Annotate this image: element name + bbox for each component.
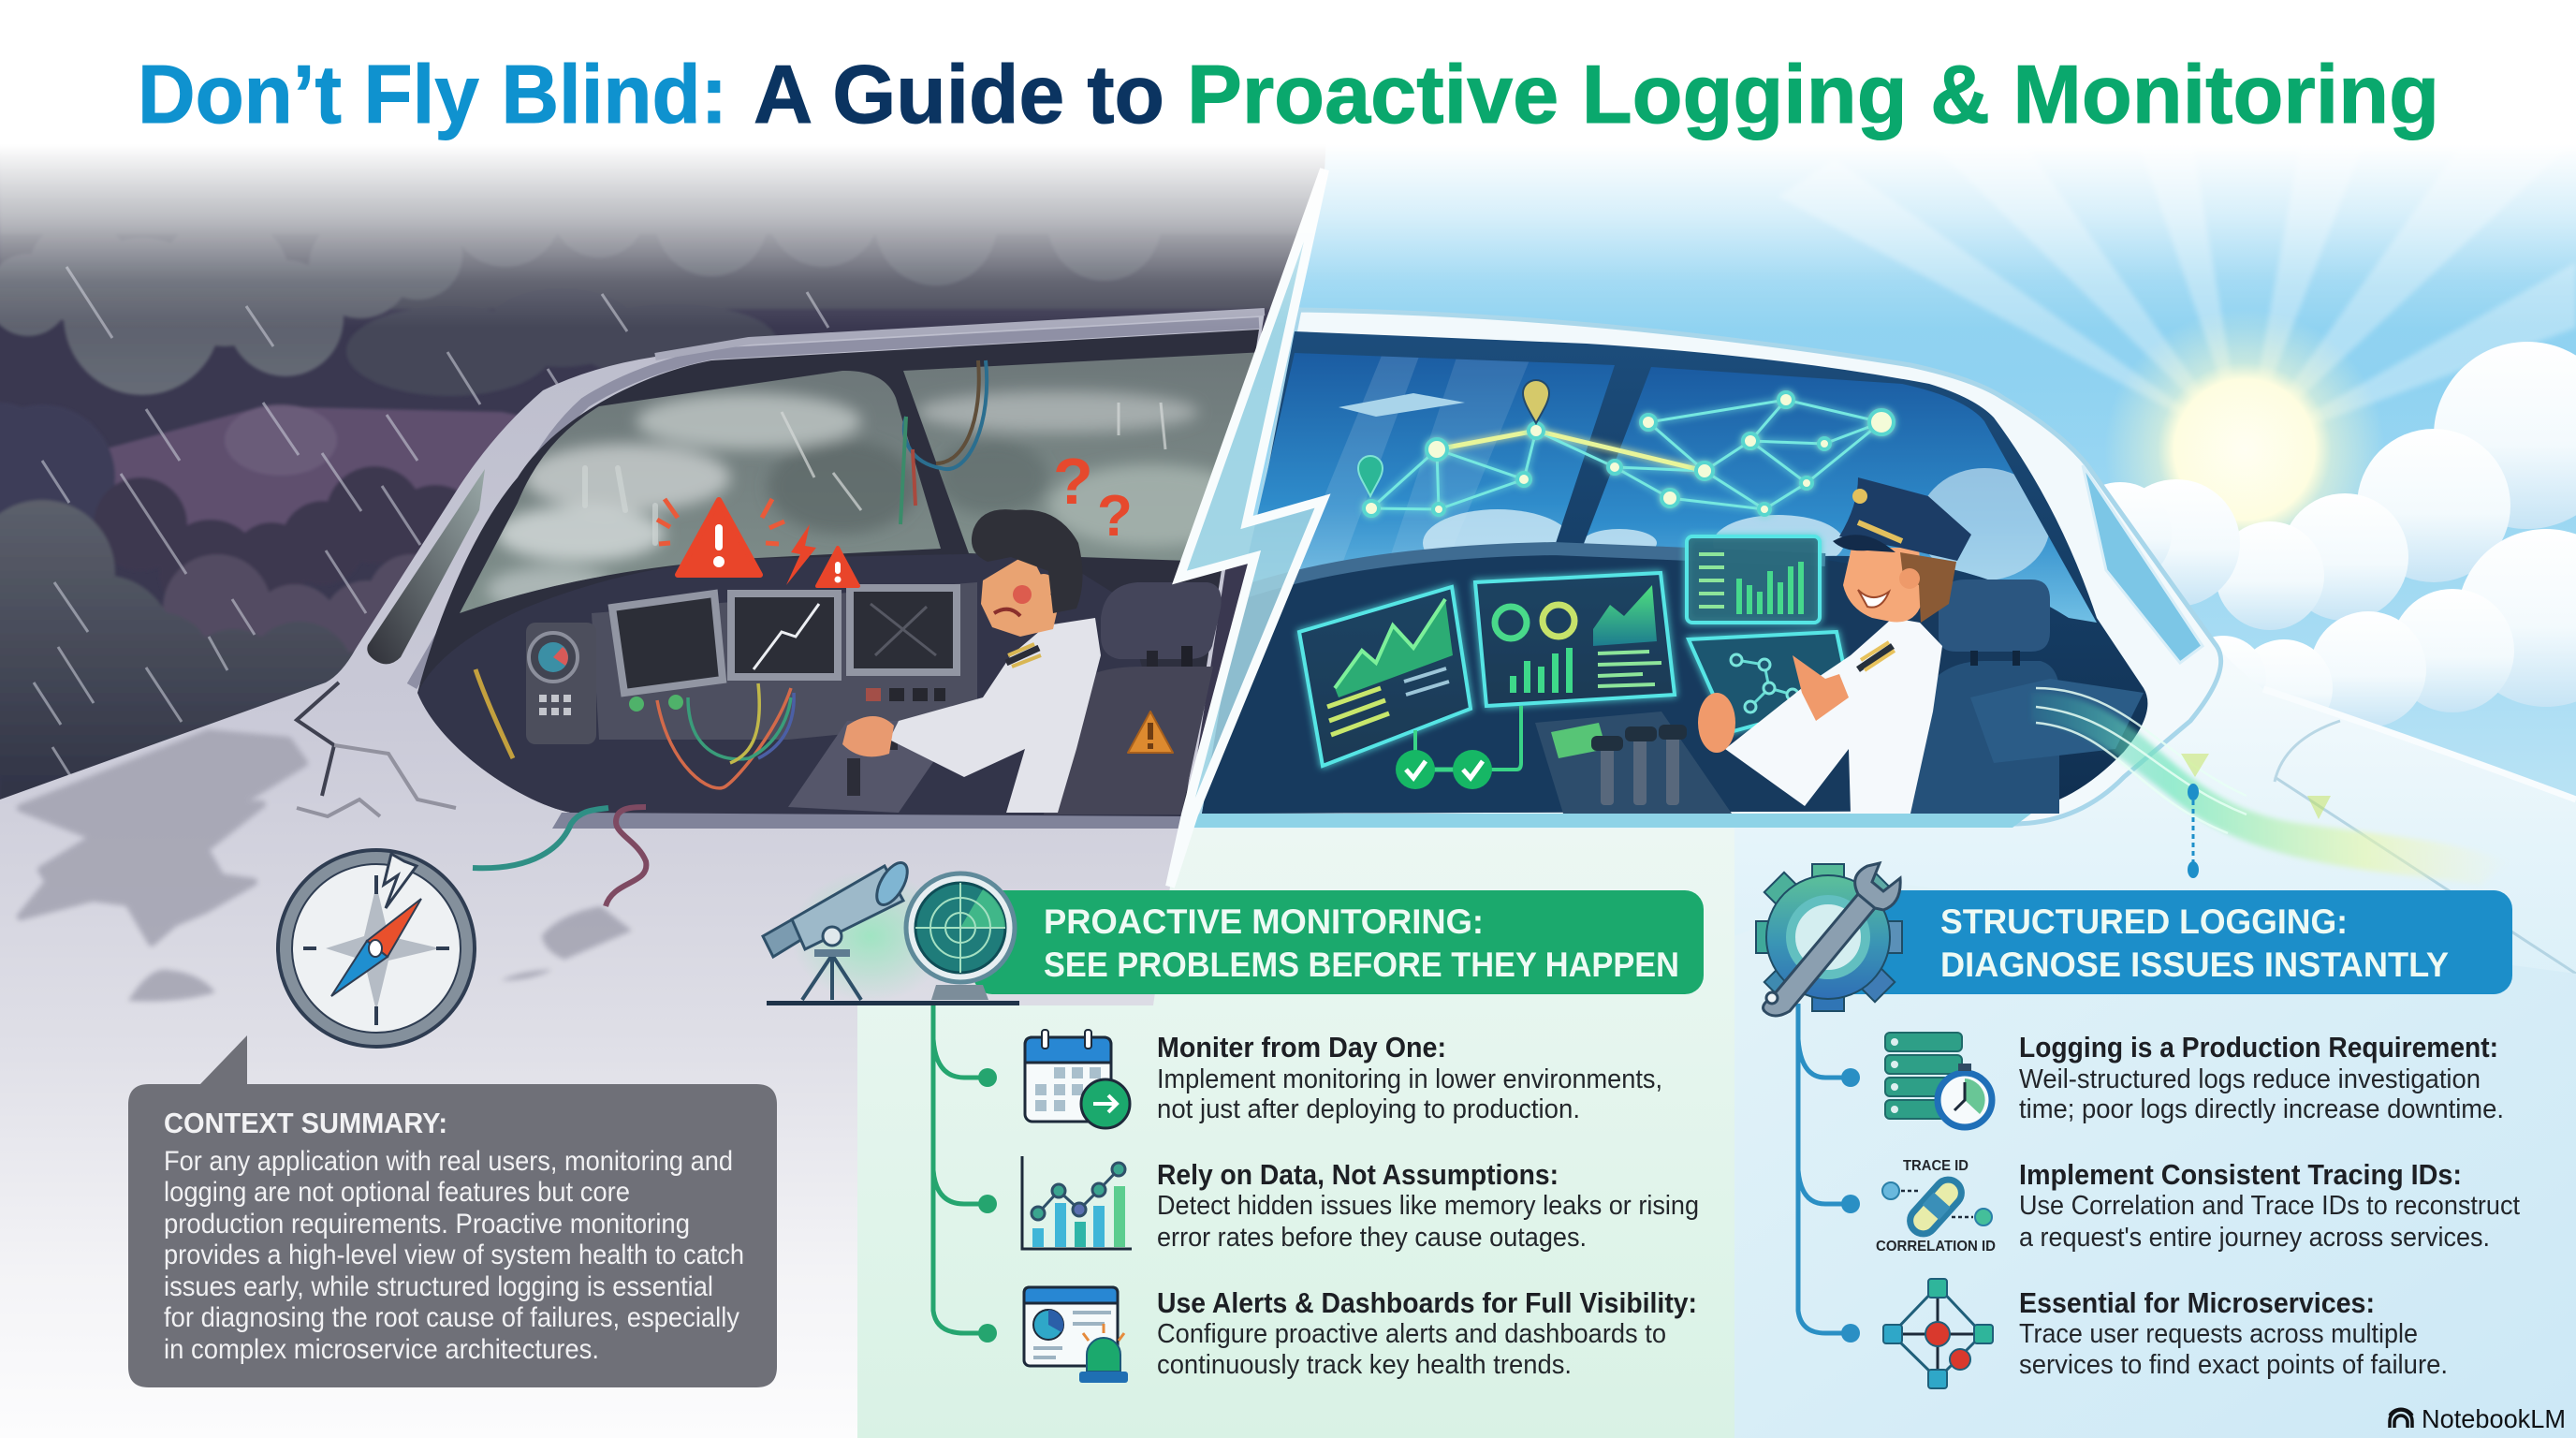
cockpit interior [417, 330, 1259, 816]
callout: context summary: for diagnosing the root cause of failures, especially [164, 1302, 739, 1333]
dashboard [417, 552, 1183, 816]
title: A Guide to [754, 48, 1164, 140]
item: monitor from day one: not just after deploying to production. [1157, 1094, 1580, 1124]
icon: dashboard with alarm [1024, 1287, 1128, 1383]
item: rely on data: Rely on Data, Not Assumptions: [1157, 1158, 1559, 1191]
header pill: STRUCTURED LOGGING: [1940, 902, 2348, 941]
sun rays [1778, 131, 2576, 450]
item: logging is a production requirement: Logging is a Production Requirement: [2019, 1031, 2498, 1064]
confused question marks: ? [1097, 484, 1133, 549]
cables off the fuselage [473, 807, 646, 906]
status checks [1396, 706, 1521, 789]
item: rely on data: Detect hidden issues like memory leaks or rising [1157, 1191, 1699, 1221]
side console with data stream source [1970, 679, 2144, 763]
title: Don’t Fly Blind: [138, 48, 727, 140]
lightning divider [1170, 169, 1325, 887]
icon: log servers with stopwatch [1885, 1033, 1992, 1127]
icon: trace link: CORRELATION ID [1876, 1239, 1996, 1255]
fogged windshields [460, 352, 1265, 613]
route network [1371, 400, 1881, 509]
item: monitor from day one: Implement monitoring in lower environments, [1157, 1064, 1662, 1094]
panel: storm side [0, 153, 1325, 1344]
seat [1044, 582, 1222, 814]
item: essential for microservices: Essential for Microservices: [2019, 1286, 2375, 1319]
item: logging is a production requirement: time; poor logs directly increase downtime. [2019, 1094, 2504, 1124]
throttle console [788, 721, 933, 813]
item: rely on data [1022, 1156, 1699, 1253]
item: alerts and dashboards [1024, 1286, 1697, 1383]
item: implement consistent tracing ids: Use Correlation and Trace IDs to reconstruct [2019, 1191, 2520, 1221]
icon: trace link [1876, 1158, 1996, 1255]
header pill [1825, 890, 2512, 994]
panel: right dashboard [1202, 536, 2041, 814]
panel: right canopy frame [1198, 310, 2221, 824]
map pins [1523, 380, 1549, 423]
side window slit [2083, 465, 2203, 663]
cracks [297, 682, 456, 816]
blue connector tree [1798, 1004, 1860, 1343]
instrument panel with gauge [476, 623, 596, 758]
callout: context summary: logging are not optional features but core [164, 1177, 630, 1208]
left pilot [842, 509, 1101, 813]
title: Proactive Logging & Monitoring [1187, 48, 2439, 140]
icon: service mesh [1883, 1279, 1993, 1388]
header pill: DIAGNOSE ISSUES INSTANTLY [1940, 946, 2449, 984]
item: alerts and dashboards: continuously track key health trends. [1157, 1350, 1572, 1380]
item: implement consistent tracing ids: Implement Consistent Tracing IDs: [2019, 1158, 2462, 1191]
title [138, 48, 2439, 140]
callout: context summary: issues early, while structured logging is essential [164, 1271, 713, 1302]
panel: blue background [1734, 880, 2576, 1438]
pilot cap [1839, 477, 1971, 561]
item: rely on data: error rates before they cause outages. [1157, 1223, 1587, 1253]
header pill [973, 890, 1704, 994]
item: implement consistent tracing ids: a request's entire journey across services. [2019, 1223, 2490, 1253]
panel: right fuselage [1161, 646, 2576, 1030]
hands [1698, 693, 1735, 753]
item: logging is a production requirement: Weil-structured logs reduce investigation [2019, 1064, 2481, 1094]
callout: context summary [128, 1035, 777, 1387]
panel: structured logging [1756, 863, 2520, 1388]
panel: right windshield with route network [1236, 346, 2106, 627]
data stream [2031, 688, 2509, 885]
item: monitor from day one [1025, 1030, 1662, 1128]
panel: clear sky with sun and clouds [1161, 0, 2576, 936]
callout: context summary: provides a high-level view of system health to catch [164, 1240, 744, 1270]
confused question marks [1056, 458, 1129, 536]
item: essential for microservices: Trace user requests across multiple [2019, 1319, 2418, 1349]
item: monitor from day one: Moniter from Day One: [1157, 1031, 1446, 1064]
icon: trace link: TRACE ID [1903, 1158, 1969, 1174]
confused question marks: ? [1053, 445, 1093, 518]
icon: telescope and radar [763, 858, 1019, 1005]
icon: trend chart [1022, 1156, 1132, 1249]
item: essential for microservices: services to find exact points of failure. [2019, 1350, 2448, 1380]
top fade [0, 0, 2576, 328]
canopy frame stripe [412, 323, 1259, 686]
callout: context summary: production requirements. Proactive monitoring [164, 1209, 690, 1240]
screen: dashboard gauges [1475, 573, 1675, 706]
oil puddles [21, 733, 632, 1002]
panel: right pilot [1698, 477, 2144, 814]
item: implement consistent tracing ids [1876, 1158, 2520, 1255]
clouds [2069, 342, 2576, 737]
header pill: PROACTIVE MONITORING: [1044, 902, 1484, 941]
sun [2104, 309, 2385, 590]
storm clouds [0, 200, 1309, 799]
panel: proactive monitoring [763, 858, 1704, 1383]
icon: calendar [1025, 1030, 1130, 1128]
warning signs [657, 499, 858, 586]
callout: context summary: For any application with real users, monitoring and [164, 1146, 733, 1177]
logo: NotebookLM: NotebookLM [2422, 1404, 2566, 1433]
rain [34, 267, 828, 777]
callout: context summary: in complex microservice architectures. [164, 1334, 599, 1365]
connector: dotted data line [2188, 784, 2199, 878]
header pill: SEE PROBLEMS BEFORE THEY HAPPEN [1044, 946, 1679, 984]
left fuselage [0, 312, 1265, 1438]
broken monitors [612, 588, 957, 701]
head [1843, 548, 1923, 622]
side window slit [367, 469, 485, 664]
epaulette [1858, 646, 1893, 669]
icon: gear and wrench [1756, 863, 1902, 1016]
item: essential for microservices [1883, 1279, 2448, 1388]
hanging wires [900, 360, 987, 524]
panel: green background [857, 829, 1734, 1438]
window sill right [1189, 814, 2031, 828]
item: alerts and dashboards: Use Alerts & Dashboards for Full Visibility: [1157, 1286, 1697, 1319]
callout: context summary: CONTEXT SUMMARY: [164, 1107, 447, 1139]
item: alerts and dashboards: Configure proactive alerts and dashboards to [1157, 1319, 1666, 1349]
seat [1939, 580, 2050, 652]
item: logging is a production requirement [1885, 1031, 2504, 1127]
icon: broken compass [277, 849, 476, 1048]
screen: bar chart [1687, 536, 1820, 623]
storm sky [0, 163, 1271, 800]
body [1725, 618, 1942, 814]
tangled wires [629, 683, 794, 788]
screen: touch diagram [1689, 632, 1851, 732]
screen: line chart [1299, 587, 1471, 766]
panel: right cockpit interior [1202, 331, 2147, 814]
throttle console [1535, 712, 1732, 814]
green connector tree [933, 1004, 997, 1343]
